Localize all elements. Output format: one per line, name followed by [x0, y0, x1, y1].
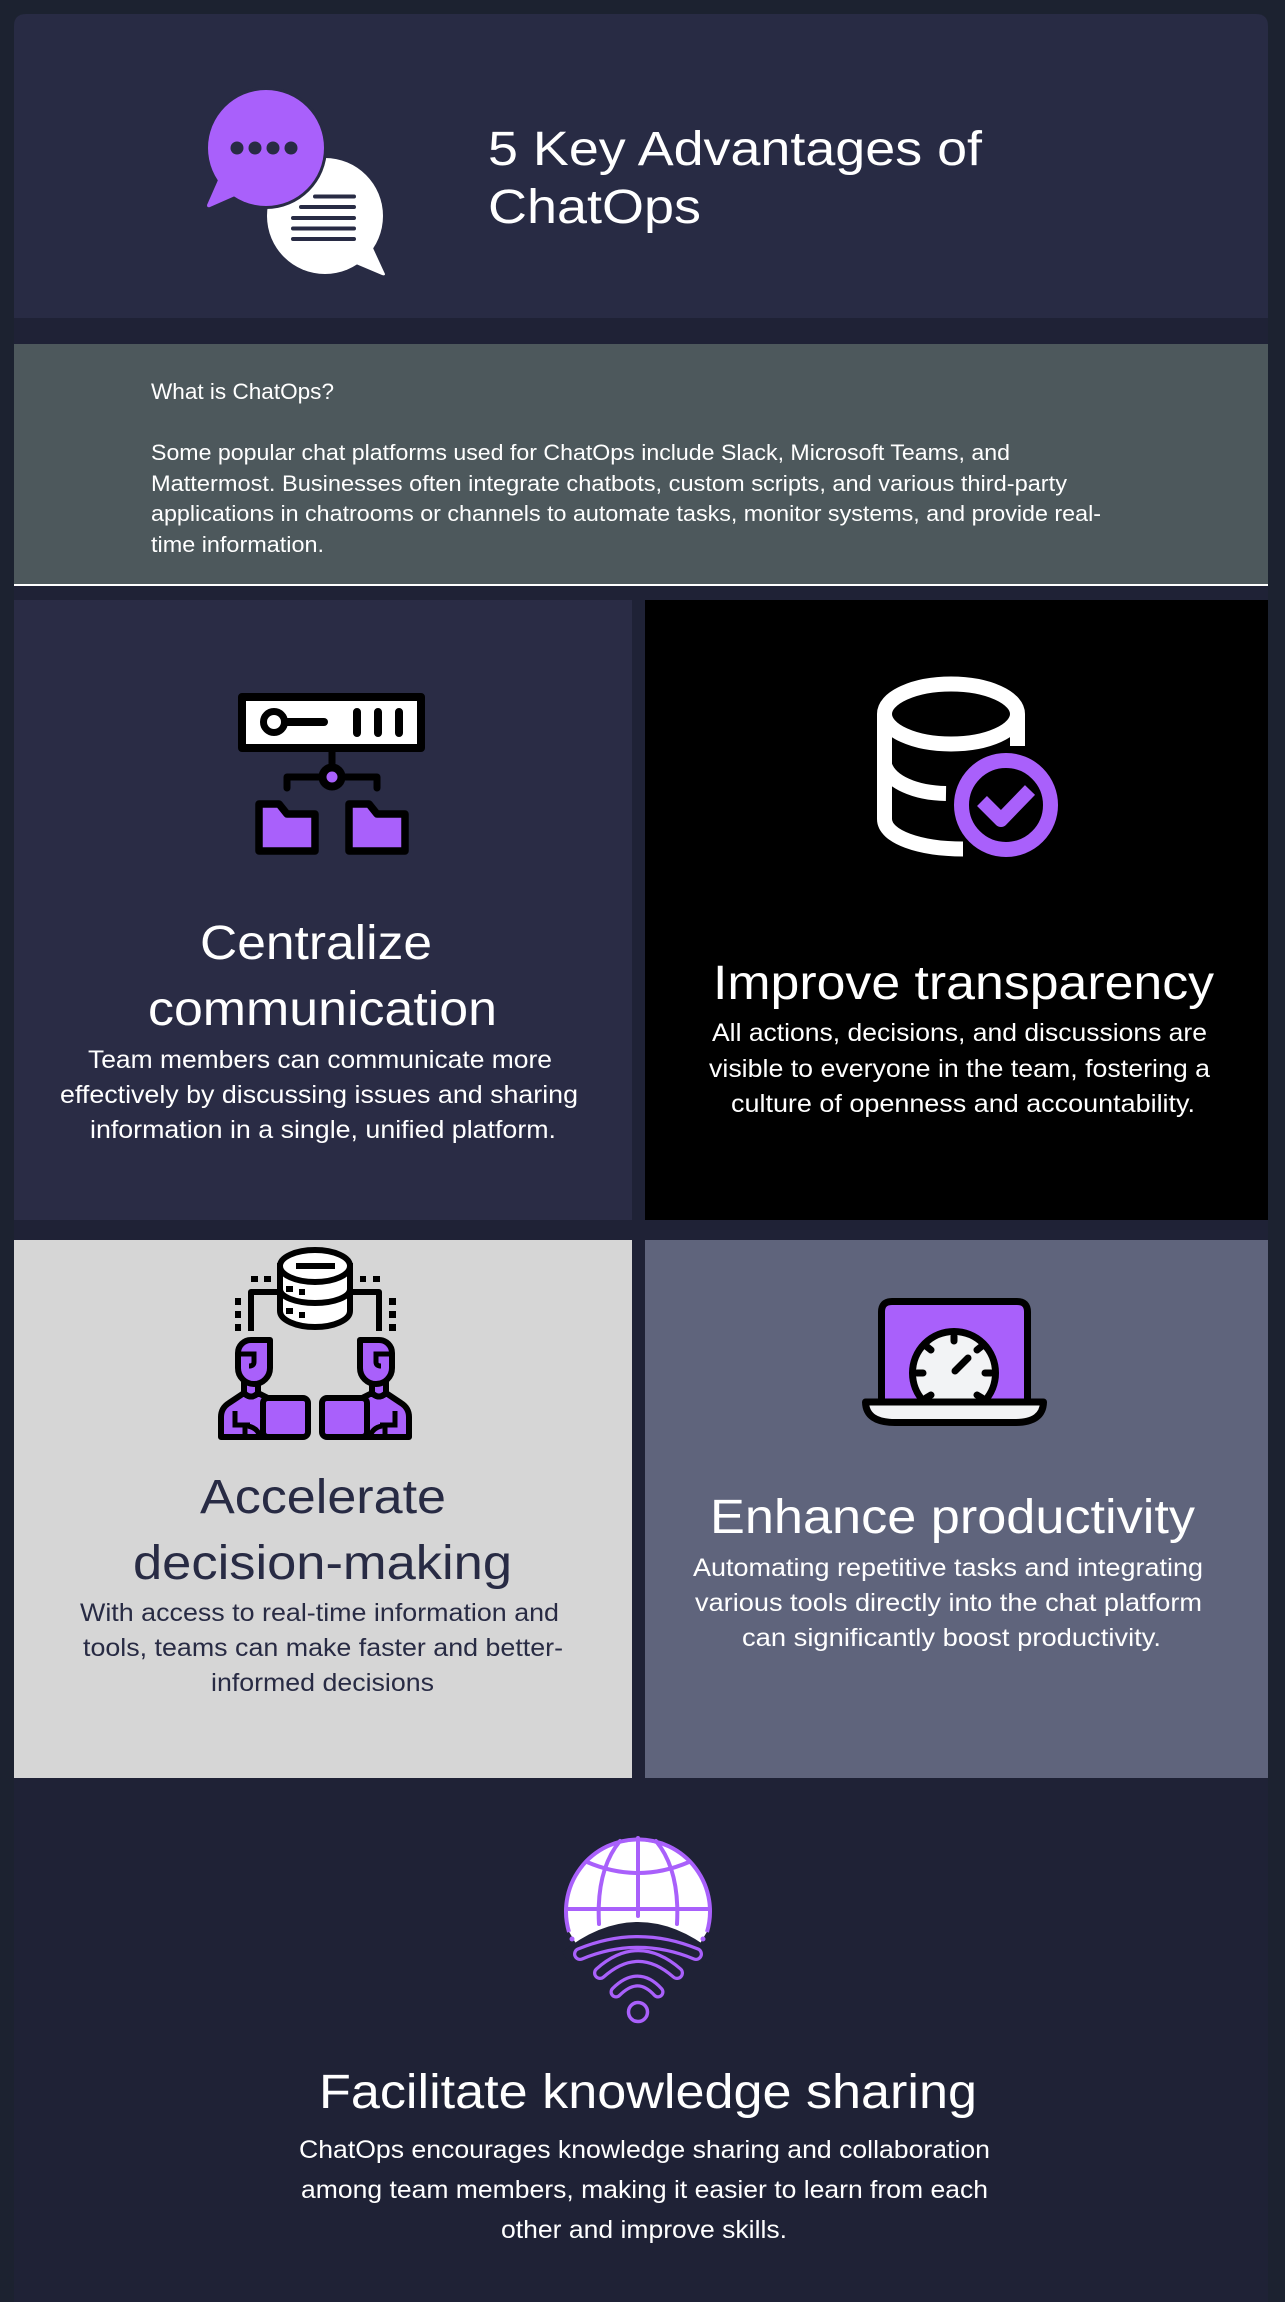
text block: centralize — [60, 1046, 578, 1144]
text block: intro: What is ChatOps? — [151, 379, 334, 404]
text block: knowledge sharing: among team members, making it easier to learn from each — [301, 2176, 988, 2204]
text block: knowledge sharing — [299, 2136, 990, 2244]
text block: transparency: visible to everyone in the team, fostering a — [709, 1055, 1210, 1083]
text block: productivity: Automating repetitive tasks and integrating — [693, 1554, 1203, 1582]
text block: intro: Some popular chat platforms used for ChatOps include Slack, Microsoft Teams, and — [151, 440, 1010, 465]
icon: server and folders — [242, 697, 421, 851]
panel: header — [14, 14, 1268, 318]
text block: productivity — [693, 1554, 1203, 1652]
heading: accelerate decision-making — [133, 1471, 512, 1590]
text block: intro — [151, 379, 1101, 557]
heading: accelerate decision-making: decision-making — [133, 1537, 512, 1590]
heading: improve transparency: Improve transparency — [713, 957, 1214, 1010]
heading: centralize communication: communication — [148, 983, 497, 1036]
text block: intro: time information. — [151, 532, 324, 557]
panel: improve transparency — [645, 600, 1268, 1220]
heading: centralize communication — [148, 917, 497, 1036]
panel: enhance productivity — [645, 1240, 1268, 1778]
icon: globe and wifi — [566, 1838, 710, 2022]
text block: accelerate: tools, teams can make faster and better- — [83, 1634, 563, 1662]
text block: accelerate — [80, 1599, 563, 1697]
title — [488, 123, 983, 234]
title: 5 Key Advantages of — [488, 123, 983, 176]
panel: accelerate decision-making — [14, 1240, 632, 1778]
heading: enhance productivity: Enhance productivity — [710, 1491, 1195, 1544]
icon: database and two people — [221, 1250, 409, 1437]
text block: transparency: culture of openness and accountability. — [731, 1090, 1195, 1118]
text block: transparency — [709, 1019, 1210, 1118]
text block: centralize: information in a single, unified platform. — [90, 1116, 556, 1144]
text block: transparency: All actions, decisions, and discussions are — [712, 1019, 1207, 1047]
text block: accelerate: With access to real-time information and — [80, 1599, 559, 1627]
text block: productivity: various tools directly into the chat platform — [695, 1589, 1202, 1617]
icon: laptop with gauge — [866, 1302, 1044, 1422]
text block: intro: applications in chatrooms or channels to automate tasks, monitor systems, and provide real- — [151, 501, 1101, 526]
icon: database with check — [884, 684, 1050, 850]
panel: what is ChatOps — [14, 344, 1268, 586]
heading: facilitate knowledge sharing: Facilitate knowledge sharing — [319, 2066, 977, 2119]
heading: centralize communication: Centralize — [200, 917, 432, 970]
text block: centralize: Team members can communicate more — [88, 1046, 552, 1074]
text block: intro: Mattermost. Businesses often integrate chatbots, custom scripts, and various third-party — [151, 471, 1067, 496]
panel: centralize communication — [14, 600, 632, 1220]
panel: facilitate knowledge sharing — [299, 1838, 990, 2244]
text block: centralize: effectively by discussing issues and sharing — [60, 1081, 578, 1109]
text block: knowledge sharing: ChatOps encourages knowledge sharing and collaboration — [299, 2136, 990, 2164]
title: ChatOps — [488, 181, 701, 234]
heading: accelerate decision-making: Accelerate — [200, 1471, 446, 1524]
text block: productivity: can significantly boost productivity. — [742, 1624, 1161, 1652]
text block: knowledge sharing: other and improve skills. — [501, 2216, 787, 2244]
icon: chat bubbles — [205, 87, 385, 275]
text block: accelerate: informed decisions — [211, 1669, 434, 1697]
